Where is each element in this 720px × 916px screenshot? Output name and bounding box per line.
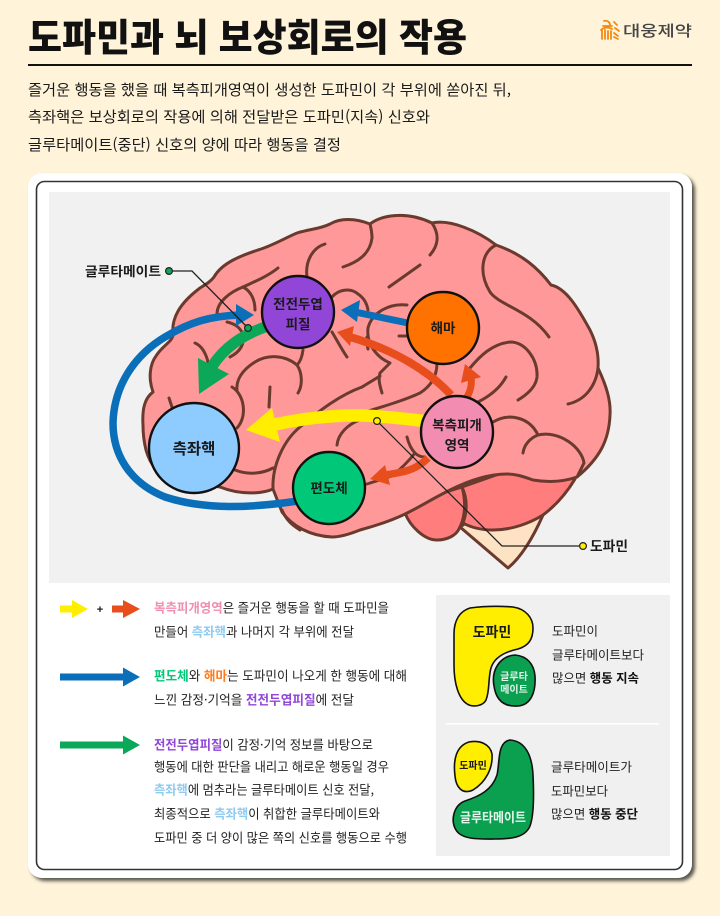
circle: 편도체	[293, 452, 365, 524]
logo: 대웅제약: 대웅제약	[623, 20, 692, 41]
legend text: dopamine: 복측피개영역은 즐거운 행동을 할 때 도파민을	[154, 598, 389, 616]
text: sustained	[552, 620, 644, 686]
diagram: dopamine larger	[454, 606, 535, 706]
circle: 전전두엽 피질: 전전두엽	[273, 293, 323, 313]
circle: 해마: 해마	[431, 317, 456, 337]
diagram: dopamine larger: 도파민	[473, 622, 511, 642]
diagram: glutamate larger: 글루타메이트	[460, 807, 526, 826]
text: stopped: 글루타메이트가	[551, 756, 632, 776]
circle: 측좌핵: 측좌핵	[173, 437, 215, 459]
intro text: 즐거운 행동을 했을 때 복측피개영역이 생성한 도파민이 각 부위에 쏟아진 뒤,	[28, 79, 511, 100]
text: stopped: 도파민보다	[551, 780, 608, 800]
legend text: dopamine: 만들어 측좌핵과 나머지 각 부위에 전달	[154, 622, 354, 640]
text: stopped	[551, 756, 638, 822]
diagram: dopamine larger: 메이트	[500, 681, 528, 696]
legend: green arrow	[60, 736, 140, 754]
circle: 복측피개 영역	[421, 396, 493, 468]
circle: 편도체: 편도체	[310, 477, 348, 497]
legend text: judgment: 최종적으로 측좌핵이 취합한 글루타메이트와	[154, 804, 380, 822]
diagram: glutamate larger	[453, 740, 534, 839]
diagram: glutamate larger: 도파민	[459, 757, 487, 772]
brainstem	[460, 500, 543, 568]
arrow: green prefrontal to nucleus accumbens	[198, 327, 265, 394]
intro text	[28, 79, 511, 155]
logo: 대웅제약	[601, 20, 692, 41]
arrow: orange VTA to hippocampus	[461, 364, 481, 397]
circle: 복측피개 영역: 영역	[445, 434, 469, 454]
legend text: memory: 느낀 감정·기억을 전전두엽피질에 전달	[154, 690, 354, 708]
circle: 복측피개 영역: 복측피개	[432, 414, 482, 434]
legend: blue arrow	[60, 668, 140, 686]
legend text: judgment: 전전두엽피질이 감정·기억 정보를 바탕으로	[154, 734, 373, 754]
text: stopped: 많으면 행동 중단	[551, 804, 638, 822]
panel: brain diagram background	[49, 192, 670, 583]
diagram: dopamine larger: 글루타	[500, 668, 528, 683]
legend text: judgment: 측좌핵에 멈추라는 글루타메이트 신호 전달,	[154, 780, 374, 798]
circle: 전전두엽 피질: 피질	[286, 313, 310, 333]
arrow: yellow VTA to nucleus accumbens	[246, 408, 424, 442]
pons lobe	[405, 487, 465, 540]
circle: 해마	[407, 292, 479, 364]
circle: 측좌핵	[149, 403, 239, 493]
panel: main card	[28, 173, 692, 878]
legend text: judgment: 도파민 중 더 양이 많은 쪽의 신호를 행동으로 수행	[154, 828, 407, 846]
panel: signal comparison	[436, 595, 670, 856]
text: sustained: 글루타메이트보다	[552, 644, 644, 664]
label: 도파민: 도파민	[590, 535, 628, 555]
label: 글루타메이트: 글루타메이트	[85, 261, 161, 280]
icon: bear	[601, 21, 619, 39]
arrow: orange VTA to amygdala	[370, 458, 428, 485]
legend text: memory: 편도체와 해마는 도파민이 나오게 한 행동에 대해	[154, 666, 407, 684]
legend: yellow and orange arrows	[60, 600, 140, 618]
label: 글루타메이트	[85, 261, 251, 331]
intro text: 측좌핵은 보상회로의 작용에 의해 전달받은 도파민(지속) 신호와	[28, 106, 430, 127]
arrow: orange VTA to prefrontal	[337, 326, 451, 395]
legend text: memory	[154, 666, 407, 708]
legend text: judgment: 행동에 대한 판단을 내리고 해로운 행동일 경우	[154, 756, 389, 776]
title: 도파민과 뇌 보상회로의 작용	[28, 7, 467, 62]
cerebellum	[462, 470, 575, 530]
text: sustained: 도파민이	[552, 620, 598, 640]
legend text: dopamine	[154, 598, 389, 640]
arrow: blue amygdala to prefrontal	[113, 304, 298, 507]
label: 도파민	[374, 418, 628, 555]
cerebrum	[143, 215, 610, 537]
brain illustration	[143, 215, 610, 568]
intro text: 글루타메이트(중단) 신호의 양에 따라 행동을 결정	[28, 134, 341, 155]
circle: 전전두엽 피질	[262, 276, 334, 348]
brain folds	[169, 223, 598, 530]
text: sustained: 많으면 행동 지속	[552, 668, 639, 686]
legend: yellow and orange arrows: +	[97, 604, 103, 616]
legend text: judgment	[154, 734, 407, 846]
arrow: blue hippocampus to prefrontal	[341, 300, 408, 323]
